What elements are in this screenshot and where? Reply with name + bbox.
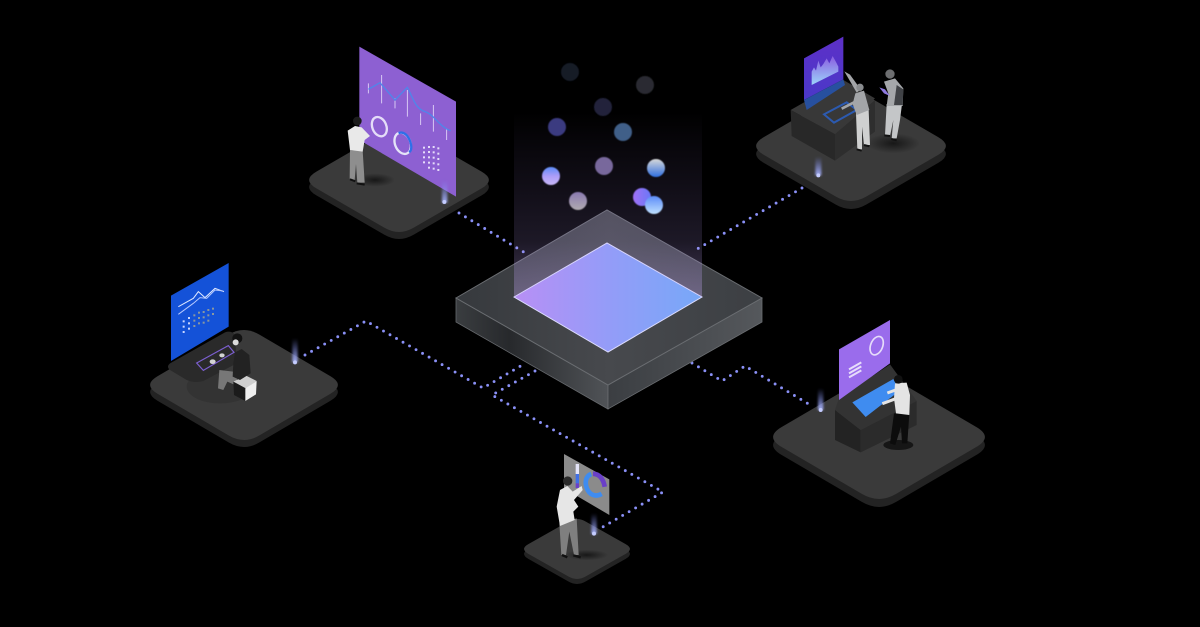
dotted connector: bottom platform to core [492, 371, 663, 528]
glowing inner square [514, 243, 702, 352]
standing user [882, 375, 910, 445]
sphere 6 [595, 157, 613, 175]
person with tablet [879, 69, 903, 140]
person shadow [355, 173, 395, 187]
shirt and vest [884, 78, 903, 106]
platform top [756, 91, 946, 201]
line chart spikes [368, 75, 447, 140]
kiosk right face [861, 401, 917, 452]
light pulse [442, 180, 447, 203]
donut chart 1 [369, 115, 390, 139]
platform left side [456, 298, 608, 409]
head [232, 333, 242, 343]
purple display screen [839, 320, 890, 400]
person presenting [842, 71, 870, 151]
platform top face [456, 210, 762, 385]
trousers [218, 370, 240, 390]
large purple dashboard and analyst, 3x local coordinates [348, 47, 456, 204]
dotted connector: left platform to core [305, 321, 524, 388]
shoes [350, 179, 365, 185]
light pulse [818, 388, 823, 410]
pulse point [442, 200, 446, 204]
head [894, 375, 903, 384]
trousers [885, 104, 902, 138]
coat and raised arm [557, 486, 583, 526]
head [353, 117, 362, 125]
trousers [890, 413, 909, 445]
platform edge [150, 337, 338, 447]
seated user [218, 333, 257, 401]
dim dot matrix [193, 308, 214, 327]
chart lines [178, 288, 224, 314]
donut chart 2 [391, 130, 414, 156]
floating data spheres [542, 63, 665, 214]
platform edge [309, 135, 489, 239]
shoes [562, 555, 581, 557]
light pulse [591, 513, 597, 534]
platform top [524, 519, 630, 579]
purple dashboard screen [359, 47, 456, 197]
kiosk sloped top [835, 364, 917, 430]
light beam rising from core [514, 112, 702, 297]
pulse point [293, 360, 297, 364]
sphere 4 [548, 118, 566, 136]
people shadow [867, 133, 920, 153]
light pulse [292, 338, 298, 362]
arms [882, 389, 898, 404]
dot matrix [183, 317, 190, 333]
platform edge [756, 99, 946, 209]
platform: bottom presenter [524, 454, 630, 584]
pulse point [819, 408, 823, 412]
ring chart [867, 334, 886, 357]
platform top [309, 128, 489, 232]
bar chart [576, 464, 579, 488]
desk left face [791, 110, 835, 161]
platform edge [773, 383, 985, 507]
platform: left desk user [150, 263, 338, 447]
sphere 9 [569, 192, 587, 210]
screen reflection [804, 79, 845, 110]
sphere 1 [561, 63, 579, 81]
purple chart screen [804, 37, 843, 100]
platform edge [524, 524, 630, 584]
analyst figure [348, 117, 370, 185]
blue screen, table and seated user, 3x local coordinates [168, 263, 298, 403]
table shadow [187, 370, 253, 403]
person shadow [565, 550, 608, 560]
desk right face [835, 100, 875, 161]
seat [233, 376, 257, 401]
line chart trace [368, 83, 451, 131]
dotted connector: right platform to core [692, 363, 812, 406]
person shadow [883, 440, 913, 450]
sphere 8 [542, 167, 560, 185]
sphere 3 [594, 98, 612, 116]
shirt [348, 126, 370, 152]
head [856, 84, 864, 91]
platform right side [608, 298, 762, 409]
head [885, 69, 895, 79]
dotted connector: top-right platform to core [692, 188, 802, 252]
shirt [894, 383, 910, 415]
platform: right kiosk user [773, 320, 985, 507]
platform top [150, 330, 338, 440]
light pulse [815, 157, 821, 175]
desk top [791, 80, 875, 134]
tablet [879, 87, 890, 96]
blue chart screen [171, 263, 229, 361]
donut chart [583, 471, 607, 498]
kiosk left face [835, 410, 861, 452]
sphere 11 [645, 196, 663, 214]
dot matrix [423, 146, 439, 171]
shoes [857, 145, 869, 151]
desk, screen and two people, 3x local coordinates [791, 37, 920, 177]
tabletop [168, 332, 237, 382]
sphere 7 [647, 159, 665, 177]
dotted connector: top-left platform to core [459, 213, 527, 254]
pointing arm [842, 102, 855, 109]
pulse point [592, 532, 596, 536]
area chart [812, 56, 838, 85]
sphere 2 [636, 76, 654, 94]
presenter figure [557, 476, 583, 557]
platform top [773, 375, 985, 499]
touch panel outline [197, 346, 234, 370]
sphere 5 [614, 123, 632, 141]
grey screen [564, 454, 609, 515]
raised arm [844, 71, 861, 93]
sphere 10 [633, 188, 651, 206]
touch panel outline [824, 102, 857, 123]
trousers [856, 110, 870, 149]
trousers [350, 150, 365, 183]
kiosk and user, 3x local coordinates [818, 320, 917, 452]
jacket [233, 349, 251, 380]
panel icons [210, 353, 225, 364]
blue touch screen [852, 379, 899, 417]
jacket [853, 91, 869, 115]
grey screen and presenter, 3x local coordinates [557, 454, 609, 560]
shoes [884, 135, 897, 140]
menu lines [849, 362, 861, 377]
platform: top-left analyst [309, 47, 489, 239]
head [563, 476, 572, 486]
trousers [559, 518, 579, 555]
platform: top-right meeting [756, 37, 946, 209]
pulse point [816, 173, 820, 177]
central platform [456, 210, 762, 409]
